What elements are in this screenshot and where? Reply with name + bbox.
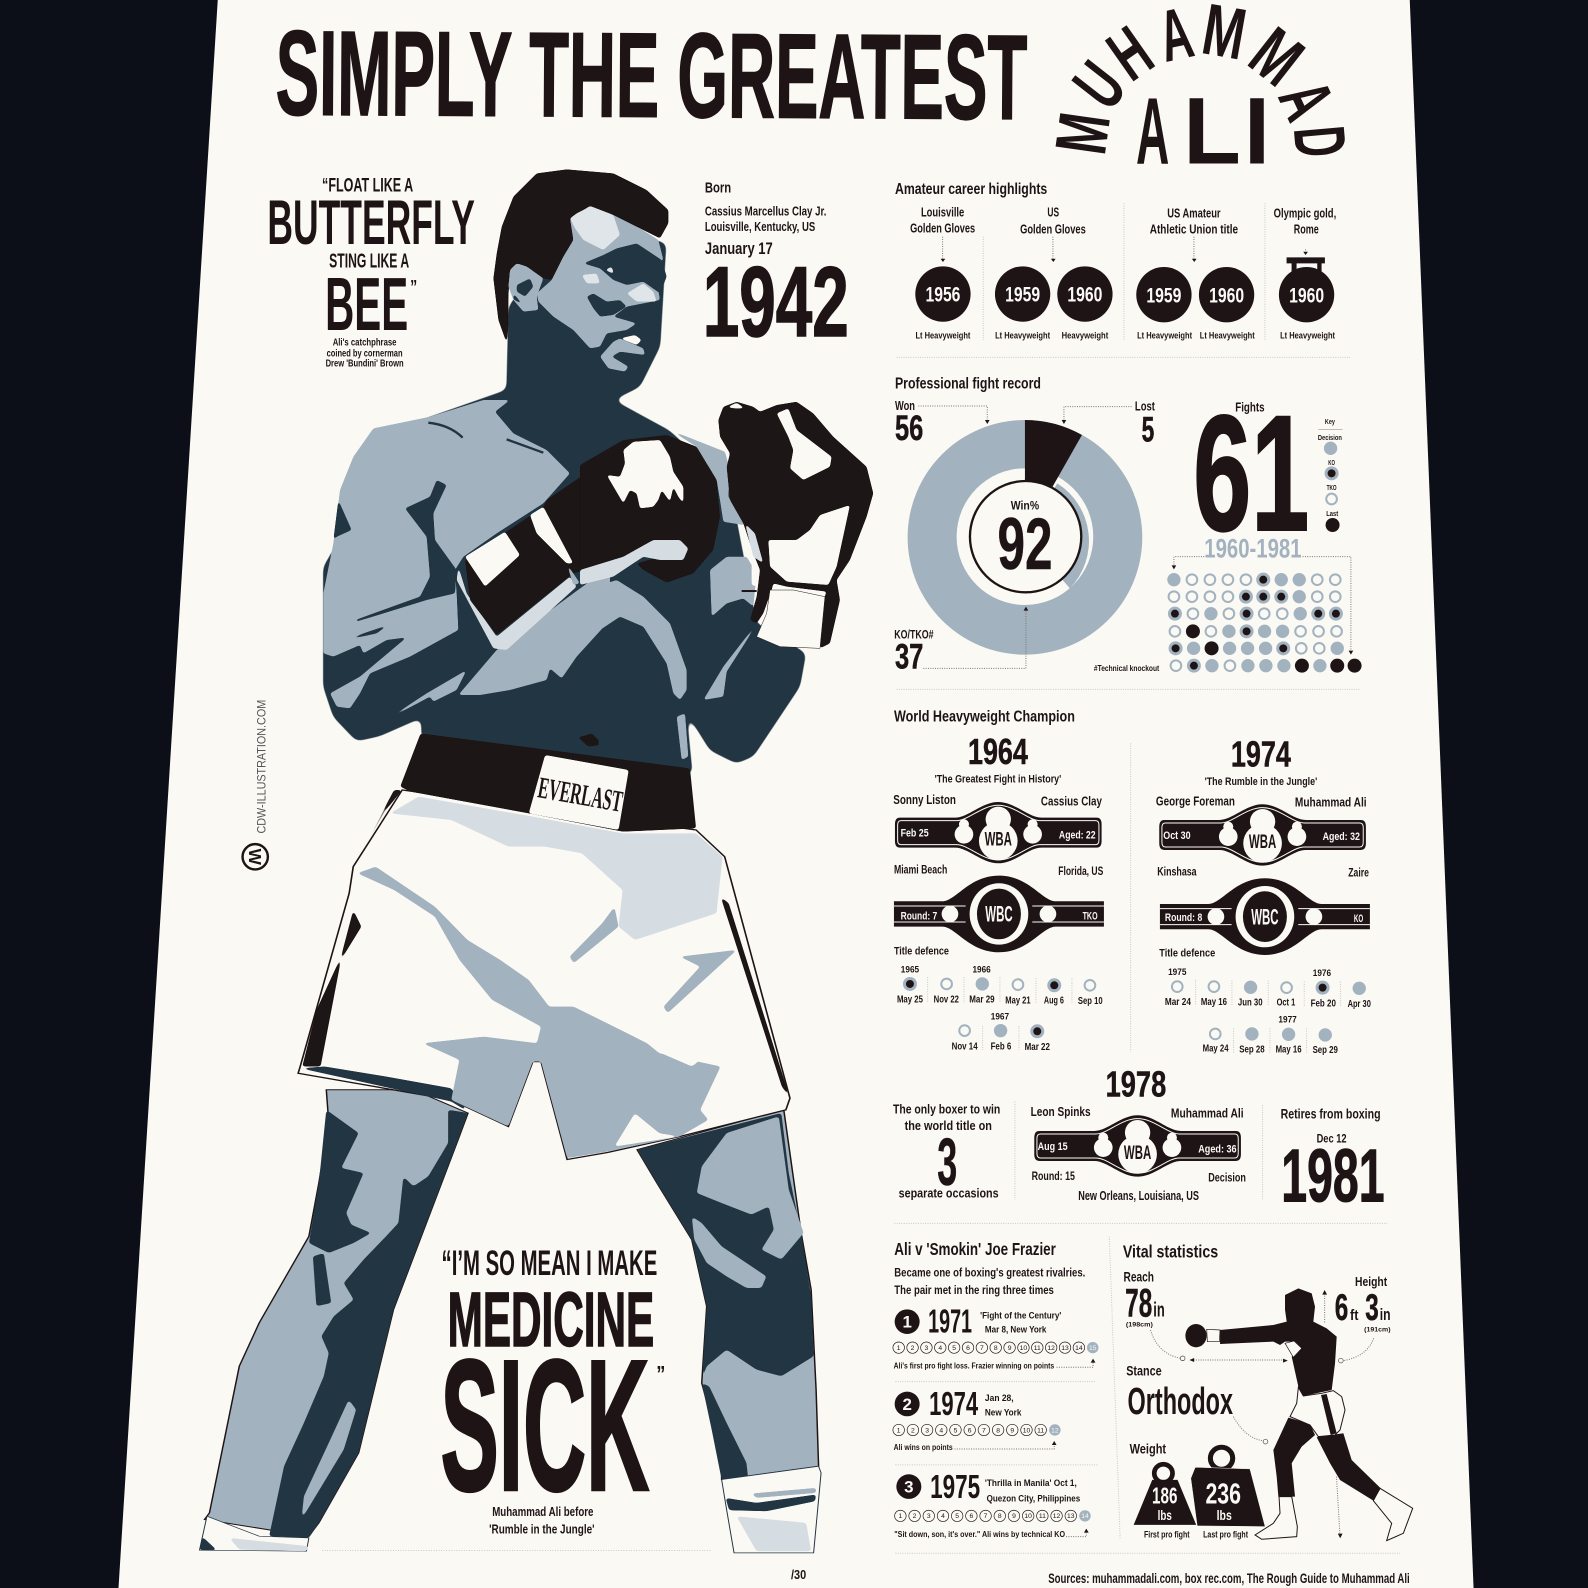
name: Muhammad Ali arc: H <box>1094 11 1167 96</box>
KO TKO <box>894 607 1159 676</box>
retires from boxing <box>1281 1105 1385 1218</box>
KO TKO: 37 <box>895 637 923 676</box>
face <box>537 206 663 348</box>
height <box>1322 1274 1391 1538</box>
1978 title fight <box>1031 1064 1246 1203</box>
stance <box>1126 1363 1268 1444</box>
1964 title fight: Miami Beach <box>894 862 947 876</box>
retires from boxing: 1981 <box>1281 1134 1385 1218</box>
fight 1: 1971: 12 <box>1047 1345 1055 1352</box>
1974 title fight: Muhammad Ali <box>1295 795 1367 810</box>
born block: 1942 <box>703 247 849 358</box>
fight 1: 1971: 14 <box>1075 1345 1083 1352</box>
donut chart <box>908 420 1142 655</box>
quote: butterfly: coined by cornerman <box>327 348 403 359</box>
quote: medicine sick: MEDICINE <box>448 1277 654 1363</box>
fight 1: 1971: 10 <box>1020 1345 1027 1352</box>
only boxer callout <box>893 1101 1000 1201</box>
fight 2: 1974: 10 <box>1023 1427 1030 1434</box>
fight 3: 1975: 8 <box>998 1513 1002 1520</box>
year medals: 1956 <box>925 283 961 307</box>
1974 title fight: Zaire <box>1348 866 1369 880</box>
1964 title defences: Nov 22 <box>934 995 959 1006</box>
heading: professional record: Professional fight record <box>895 375 1041 392</box>
amateur title labels: Louisville <box>921 205 964 220</box>
fight 1: 1971: 11 <box>1034 1345 1041 1352</box>
1974 title defences: May 16 <box>1201 997 1227 1008</box>
year medals: 1959 <box>1146 283 1182 307</box>
born block: Louisville, Kentucky, US <box>705 219 815 234</box>
fight 2: 1974: 3 <box>925 1427 929 1434</box>
weight classes: Heavyweight <box>1062 330 1108 340</box>
fight 3: 1975: 9 <box>1012 1513 1016 1520</box>
fight 3: 1975: 12 <box>1053 1513 1061 1520</box>
hair <box>493 169 668 343</box>
only boxer callout: separate occasions <box>899 1186 999 1201</box>
arm and chest shading, left <box>323 400 610 722</box>
torso <box>323 218 806 775</box>
1978 title fight: New Orleans, Louisiana, US <box>1078 1189 1199 1203</box>
height: 6 <box>1335 1287 1348 1328</box>
height: (191cm) <box>1364 1327 1391 1334</box>
fight 2: 1974: 1974 <box>929 1386 978 1423</box>
only boxer callout: the world title on <box>905 1118 992 1133</box>
frazier intro: The pair met in the ring three times <box>894 1283 1054 1297</box>
fight 3: 1975: 3 <box>904 1478 914 1497</box>
watermark: CDW-ILLUSTRATION.COM <box>254 700 268 833</box>
1974 title defences: 1977 <box>1278 1014 1297 1024</box>
quote: medicine sick <box>441 1243 665 1536</box>
fight 1: 1971: 5 <box>952 1345 956 1352</box>
year medals: 1960 <box>1289 283 1324 307</box>
1964 title fight: TKO <box>1083 910 1098 922</box>
fights total <box>1193 381 1309 565</box>
fight 1: 1971: 2 <box>911 1345 915 1352</box>
born block: Born <box>705 179 731 196</box>
fight 2: 1974: Jan 28, <box>985 1392 1014 1403</box>
fight 1: 1971: 9 <box>1008 1345 1012 1352</box>
fight 3: 1975: 1975 <box>930 1469 980 1506</box>
1974 title defences: May 24 <box>1203 1044 1229 1055</box>
fight 2: 1974: Ali wins on points <box>894 1442 953 1452</box>
fight 2: 1974: 6 <box>968 1427 972 1434</box>
name: Muhammad Ali arc: D <box>1278 123 1361 160</box>
1964 title fight: Cassius Clay <box>1041 794 1102 809</box>
fight 1: 1971: 15 <box>1089 1345 1097 1352</box>
1974 title fight: 1974 <box>1231 734 1291 775</box>
1978 title fight: Leon Spinks <box>1031 1104 1091 1119</box>
fight 2: 1974: 12 <box>1051 1427 1059 1434</box>
1978 title fight: Aug 15 <box>1038 1141 1068 1153</box>
1974 title defences: Oct 1 <box>1277 998 1296 1009</box>
key <box>1318 417 1343 532</box>
name: Muhammad Ali arc: M <box>1040 108 1126 159</box>
fight 3: 1975: 7 <box>984 1513 988 1520</box>
1974 title defences: Sep 28 <box>1239 1044 1265 1055</box>
1974 title fight: Kinshasa <box>1157 865 1197 879</box>
amateur title labels: US <box>1047 205 1059 220</box>
frazier intro: Became one of boxing's greatest rivalries. <box>894 1266 1085 1280</box>
amateur title labels: US Amateur <box>1167 205 1221 220</box>
right glove <box>718 402 873 648</box>
weights: Weight <box>1130 1440 1166 1456</box>
left glove cuff <box>457 457 610 650</box>
fight 1: 1971: Ali's first pro fight loss. Frazier winning on points <box>894 1360 1054 1370</box>
1974 title defences: 1976 <box>1313 968 1331 978</box>
amateur title labels: Golden Gloves <box>910 221 975 236</box>
shorts <box>298 733 790 1160</box>
weights <box>1130 1440 1265 1540</box>
born block <box>703 179 849 358</box>
1978 title fight: Aged: 36 <box>1198 1144 1237 1156</box>
1974 title fight <box>1156 734 1370 955</box>
1978 title fight: 1978 <box>1106 1064 1166 1105</box>
1974 title defences: Apr 30 <box>1348 999 1371 1010</box>
key: TKO <box>1327 483 1337 492</box>
1964 title fight: 1964 <box>968 731 1028 772</box>
fight 3: 1975: 2 <box>913 1513 917 1520</box>
fight 2: 1974: 2 <box>911 1427 915 1434</box>
fight 3: 1975: 'Thrilla in Manila' Oct 1, <box>985 1477 1077 1488</box>
quote: medicine sick: Muhammad Ali before <box>492 1504 593 1519</box>
reach <box>1123 1269 1288 1363</box>
panel: world heavyweight champion <box>893 709 1385 1218</box>
quote: butterfly: “FLOAT LIKE A <box>322 175 413 196</box>
fight 2: 1974: 8 <box>996 1427 1000 1434</box>
name: Muhammad Ali arc: A <box>1263 69 1350 132</box>
everlast text: EVERLAST <box>536 770 625 819</box>
1978 title fight: WBA <box>1124 1143 1151 1164</box>
fight 3: 1975: "Sit down, son, it's over." Ali wins by technical KO <box>894 1529 1065 1539</box>
1974 title defences: Feb 20 <box>1311 998 1336 1009</box>
sources: Sources: muhammadali.com, box rec.com, The Rough Guide to Muhammad Ali <box>1048 1571 1410 1587</box>
name: Muhammad Ali arc: A <box>1136 78 1169 183</box>
fights total: Fights <box>1235 400 1265 415</box>
donut chart: 92 <box>997 503 1052 585</box>
fight 1: 1971: 1 <box>897 1345 901 1352</box>
weight classes <box>915 330 1335 341</box>
year medals <box>915 266 1334 322</box>
lost <box>1062 399 1155 450</box>
weights: lbs <box>1217 1507 1232 1523</box>
panel: amateur and record <box>894 181 1362 689</box>
1974 title defences: Jun 30 <box>1238 998 1263 1009</box>
fight 3: 1975: 11 <box>1039 1513 1046 1520</box>
arm and chest shading, right <box>580 430 757 760</box>
key: Key <box>1325 417 1336 426</box>
1964 title defences: Sep 10 <box>1078 996 1103 1007</box>
quote: butterfly: Drew 'Bundini' Brown <box>326 359 404 370</box>
quote: medicine sick: ” <box>656 1361 665 1386</box>
frazier intro <box>894 1266 1085 1297</box>
fight 3: 1975: 4 <box>941 1513 945 1520</box>
fight 1: 1971: 6 <box>966 1345 970 1352</box>
KO TKO: #Technical knockout <box>1094 663 1159 673</box>
key: Decision <box>1318 433 1342 442</box>
1964 title fight: Florida, US <box>1058 864 1103 878</box>
1964 title defences: May 21 <box>1005 995 1031 1006</box>
boxer silhouette <box>1185 1288 1413 1541</box>
right leg <box>637 1110 821 1553</box>
fight 1: 1971: 7 <box>980 1345 984 1352</box>
heading: world champion: World Heavyweight Champion <box>894 709 1075 726</box>
height: Height <box>1355 1274 1388 1289</box>
1964 title fight: WBC <box>985 902 1013 927</box>
weights: Last pro fight <box>1203 1529 1248 1540</box>
page number: /30 <box>791 1567 806 1582</box>
fight 1: 1971: 1 <box>902 1313 912 1332</box>
name: Muhammad Ali arc: L <box>1183 78 1241 183</box>
panel: frazier and vital statistics <box>893 1223 1400 1553</box>
1964 title fight <box>893 731 1104 952</box>
fights total: 1960-1981 <box>1204 534 1302 564</box>
quote: butterfly: STING LIKE A <box>329 250 409 272</box>
1964 title defences: Feb 6 <box>991 1041 1012 1052</box>
medal ribbon <box>1287 257 1325 273</box>
ear <box>508 263 543 312</box>
1974 title fight: Oct 30 <box>1163 830 1191 842</box>
fight 2: 1974 <box>893 1386 1061 1452</box>
quote: butterfly: BUTTERFLY <box>267 188 475 258</box>
won: 56 <box>895 409 923 448</box>
1964 title defences: Mar 22 <box>1025 1042 1050 1053</box>
fight 1: 1971: 4 <box>938 1345 942 1352</box>
1964 title fight: Feb 25 <box>901 828 929 840</box>
weight classes: Lt Heavyweight <box>1137 331 1192 341</box>
fight 2: 1974: New York <box>985 1407 1022 1418</box>
quote: medicine sick: SICK <box>441 1322 649 1530</box>
1964 title fight: 'The Greatest Fight in History' <box>935 774 1062 786</box>
born block: January 17 <box>705 240 773 258</box>
1974 title defences <box>1159 948 1371 1056</box>
1964 title defences: Aug 6 <box>1044 995 1064 1006</box>
amateur title labels: Athletic Union title <box>1150 221 1238 236</box>
fight 2: 1974: 11 <box>1037 1427 1044 1434</box>
KO TKO: KO/TKO# <box>894 627 934 641</box>
1974 title defences: Title defence <box>1159 948 1215 960</box>
name: Muhammad Ali arc: U <box>1058 47 1142 123</box>
left leg <box>199 1090 468 1551</box>
quote: butterfly: BEE <box>325 262 408 346</box>
fight 2: 1974: 5 <box>954 1427 958 1434</box>
amateur title labels <box>910 205 1336 236</box>
1964 title defences: May 25 <box>897 995 923 1006</box>
1964 title defences <box>894 945 1103 1053</box>
1974 title defences: Mar 24 <box>1165 997 1191 1008</box>
fight 1: 1971: 8 <box>994 1345 998 1352</box>
fight 2: 1974: 7 <box>982 1427 986 1434</box>
weight classes: Lt Heavyweight <box>1200 331 1255 341</box>
fight 1: 1971: Mar 8, New York <box>985 1324 1047 1335</box>
quote: butterfly: Ali's catchphrase <box>333 337 397 348</box>
1964 title defences: Title defence <box>894 945 949 957</box>
fight 3: 1975: 5 <box>955 1513 959 1520</box>
1978 title fight: Decision <box>1208 1171 1246 1185</box>
fight 1: 1971: 3 <box>925 1345 929 1352</box>
1974 title defences: Sep 29 <box>1313 1045 1338 1056</box>
weight classes: Lt Heavyweight <box>915 330 970 340</box>
heading: frazier: Ali v 'Smokin' Joe Frazier <box>894 1239 1056 1259</box>
1974 title fight: Aged: 32 <box>1323 831 1360 843</box>
height: in <box>1380 1305 1391 1324</box>
name: Muhammad Ali arc: I <box>1244 78 1270 183</box>
lost: Lost <box>1135 399 1155 414</box>
retires from boxing: Retires from boxing <box>1281 1105 1381 1121</box>
born block: Cassius Marcellus Clay Jr. <box>705 204 826 219</box>
reach: Reach <box>1123 1269 1154 1285</box>
reach: in <box>1153 1300 1165 1322</box>
fight 2: 1974: 1 <box>897 1427 901 1434</box>
quote: butterfly <box>267 175 475 370</box>
weights: 236 <box>1205 1478 1241 1510</box>
illustration: Ali boxer figure <box>199 169 873 1553</box>
donut chart: Win% <box>1011 498 1039 512</box>
fight 2: 1974: 9 <box>1010 1427 1014 1434</box>
year medals: 1960 <box>1067 283 1102 307</box>
amateur title labels: Golden Gloves <box>1020 221 1086 236</box>
weights: First pro fight <box>1144 1529 1190 1540</box>
1974 title fight: KO <box>1354 913 1363 925</box>
1974 title defences: May 16 <box>1276 1044 1302 1055</box>
1964 title defences: 1965 <box>901 965 919 975</box>
fight 3: 1975: 1 <box>899 1513 903 1520</box>
only boxer callout: 3 <box>937 1126 957 1200</box>
1974 title fight: WBC <box>1251 904 1279 929</box>
1964 title defences: 1967 <box>991 1011 1009 1021</box>
reach: (198cm) <box>1126 1322 1153 1329</box>
1974 title fight: WBA <box>1249 832 1276 853</box>
quote: medicine sick: 'Rumble in the Jungle' <box>489 1521 594 1536</box>
stance: Orthodox <box>1128 1380 1233 1423</box>
fight 1: 1971 <box>893 1304 1098 1370</box>
mouth <box>600 338 645 372</box>
height: ft <box>1350 1307 1358 1324</box>
everlast label <box>529 755 629 830</box>
weight classes: Lt Heavyweight <box>1280 331 1335 341</box>
fight 3: 1975: 6 <box>969 1513 974 1520</box>
belt <box>400 733 696 832</box>
watermark <box>243 700 268 869</box>
1974 title fight: George Foreman <box>1156 794 1235 809</box>
fight 3: 1975: 3 <box>927 1513 931 1520</box>
1964 title fight: WBA <box>985 830 1012 851</box>
heading: amateur career: Amateur career highlights <box>895 181 1047 198</box>
lost: 5 <box>1142 411 1154 450</box>
weights: 186 <box>1152 1482 1177 1508</box>
amateur title labels: Olympic gold, <box>1274 205 1336 220</box>
height: 3 <box>1365 1287 1379 1328</box>
fight grid <box>1167 573 1362 673</box>
1964 title defences: Nov 14 <box>952 1041 978 1052</box>
fights total: 61 <box>1193 381 1309 565</box>
fight 1: 1971: 1971 <box>928 1304 972 1341</box>
1974 title fight: Round: 8 <box>1165 912 1202 924</box>
1974 title fight: 'The Rumble in the Jungle' <box>1205 776 1317 788</box>
retires from boxing: Dec 12 <box>1317 1131 1347 1145</box>
watermark: W <box>245 849 265 866</box>
fight 3: 1975: 14 <box>1081 1513 1089 1520</box>
fight 2: 1974: 2 <box>902 1395 912 1414</box>
fight 3: 1975: Quezon City, Philippines <box>987 1493 1080 1504</box>
head <box>493 169 668 372</box>
reach: 78 <box>1125 1281 1152 1326</box>
won: Won <box>895 398 915 413</box>
fight 3: 1975: 13 <box>1067 1513 1075 1520</box>
name: Muhammad Ali arc: M <box>1235 12 1318 102</box>
fight 3: 1975: 10 <box>1024 1513 1032 1520</box>
1964 title defences: 1966 <box>972 965 991 975</box>
only boxer callout: The only boxer to win <box>893 1101 1000 1116</box>
key: KO <box>1328 458 1335 467</box>
amateur title labels: Rome <box>1294 221 1319 236</box>
fight 1: 1971: 13 <box>1061 1345 1069 1352</box>
stance: Stance <box>1126 1363 1162 1379</box>
1964 title fight: Round: 7 <box>901 910 937 922</box>
quote: medicine sick: “I’M SO MEAN I MAKE <box>442 1243 657 1283</box>
key: Last <box>1326 509 1339 518</box>
heading: vital statistics: Vital statistics <box>1123 1242 1218 1262</box>
name: Muhammad Ali arc <box>1040 0 1361 183</box>
fight 1: 1971: 'Fight of the Century' <box>980 1309 1061 1320</box>
quote: butterfly: ” <box>410 278 417 299</box>
1978 title fight: Round: 15 <box>1032 1169 1075 1183</box>
1978 title fight: Muhammad Ali <box>1171 1106 1244 1121</box>
1964 title defences: Mar 29 <box>969 995 995 1006</box>
1974 title defences: 1975 <box>1168 967 1186 977</box>
1964 title fight: Aged: 22 <box>1059 829 1096 841</box>
weights: lbs <box>1158 1507 1172 1523</box>
fight 3: 1975 <box>894 1469 1091 1539</box>
year medals: 1960 <box>1209 283 1244 307</box>
weight classes: Lt Heavyweight <box>995 330 1050 340</box>
fight 2: 1974: 4 <box>939 1427 943 1434</box>
1964 title fight: Sonny Liston <box>893 792 956 807</box>
won <box>895 398 990 448</box>
year medals: 1959 <box>1005 283 1040 307</box>
left glove <box>580 402 873 648</box>
